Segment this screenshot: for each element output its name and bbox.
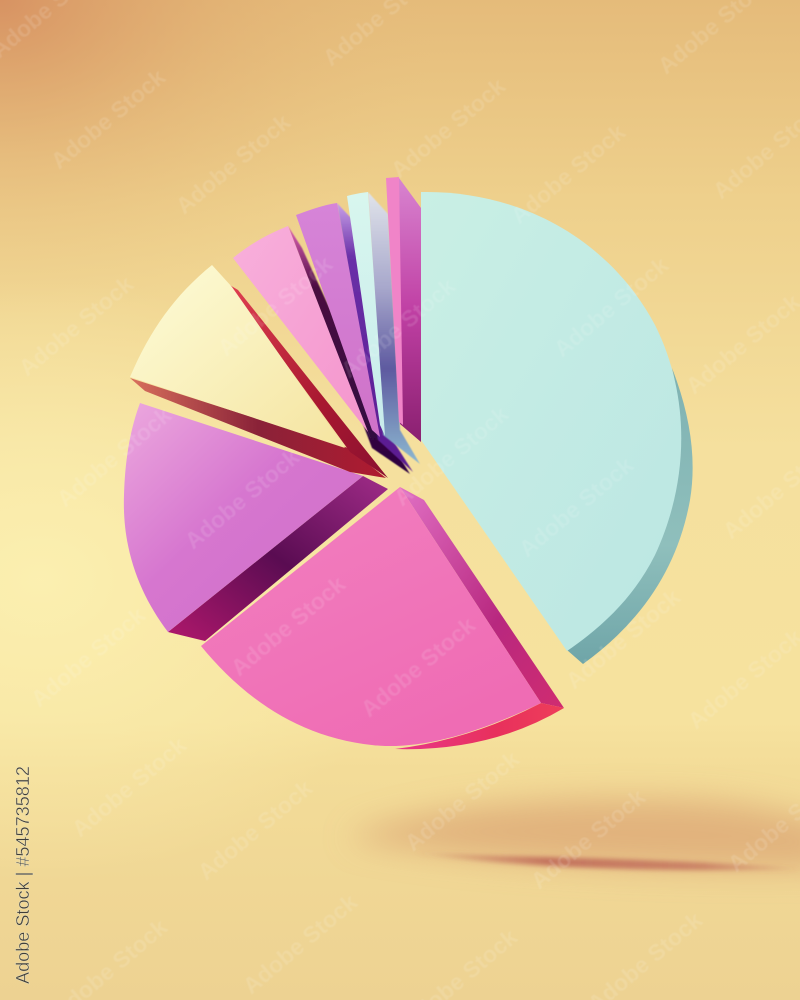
slice: magenta sliver (386, 177, 421, 442)
watermark pattern: Adobe Stock (356, 612, 480, 722)
watermark pattern: Adobe Stock (549, 252, 673, 362)
slice: large pink (201, 487, 564, 749)
watermark pattern: Adobe Stock (238, 889, 362, 999)
watermark pattern: Adobe Stock (67, 732, 191, 842)
watermark pattern: Adobe Stock (506, 119, 630, 229)
watermark pattern: Adobe Stock (389, 401, 513, 511)
watermark pattern: Adobe Stock (46, 64, 170, 174)
slice: mauve (296, 203, 413, 472)
watermark pattern: Adobe Stock (526, 784, 650, 894)
watermark pattern: Adobe Stock (180, 444, 304, 554)
watermark pattern: Adobe Stock (14, 271, 138, 381)
watermark pattern: Adobe Stock (561, 584, 685, 694)
slice: light pink (233, 226, 410, 474)
slice: cream (130, 265, 388, 478)
watermark pattern: Adobe Stock (336, 273, 460, 383)
stock ID text: Adobe Stock | #545735812 (12, 766, 33, 984)
watermark pattern: Adobe Stock (226, 571, 350, 681)
slice: mint (347, 192, 420, 464)
watermark pattern: Adobe Stock (26, 602, 150, 712)
pie chart (124, 177, 693, 749)
floor shadow (345, 799, 800, 870)
slice: purple (124, 403, 388, 641)
watermark pattern: Adobe Stock (400, 746, 524, 856)
slice: large teal (421, 192, 693, 664)
watermark pattern: Adobe Stock (213, 251, 337, 361)
watermark pattern: Adobe Stock (386, 73, 510, 183)
watermark pattern: Adobe Stock (52, 402, 176, 512)
watermark pattern: Adobe Stock (193, 775, 317, 885)
watermark pattern: Adobe Stock (171, 109, 295, 219)
watermark pattern: Adobe Stock (514, 452, 638, 562)
